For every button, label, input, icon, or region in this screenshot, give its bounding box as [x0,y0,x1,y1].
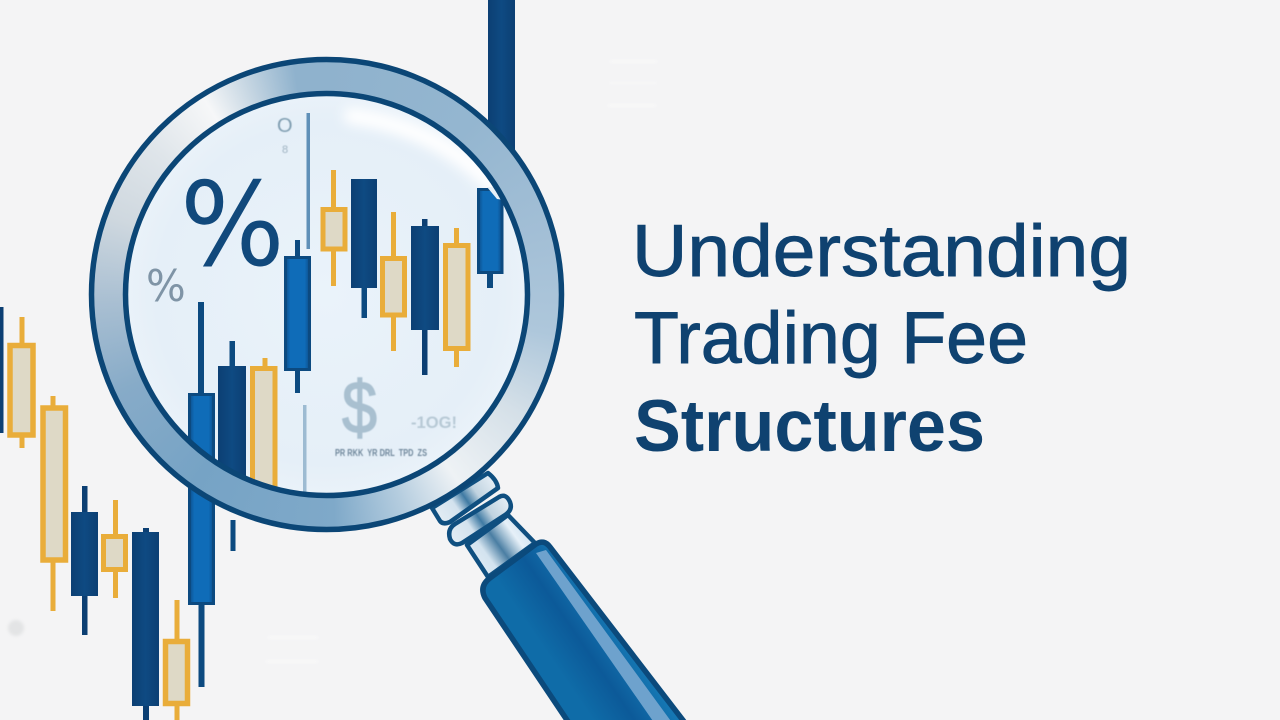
chart scene: candlesticks, lens and handle [0,0,686,720]
gold candle 3 [391,212,396,351]
tall navy candle behind the lens [488,0,515,160]
handle neck [467,515,535,577]
title line 3: Structures [634,386,985,467]
title line 2: Trading Fee [634,298,1028,379]
gold candle 4 [454,228,459,367]
magnifier handle [432,473,692,720]
decorative grey dot [8,620,24,636]
navy candle 3 [422,219,428,375]
handle highlight [536,550,673,720]
lens glass [126,94,528,496]
metallic lens ring [89,57,564,532]
navy candle 1 [230,341,235,366]
thin reference lines [306,113,310,249]
small percent symbol: % [146,261,186,312]
outside candlesticks [0,307,188,720]
title line 1: Understanding [632,211,1131,292]
faint background streaks bottom [266,636,318,663]
blue candle crossing the lens rim [190,302,236,687]
title [632,211,1131,467]
tiny blurred caption: PR RKK YR DRL TPD ZS [335,448,427,459]
small blurred figure: -1OG! [411,413,457,432]
highlight notch on blue candle [487,187,500,200]
handle grip [483,542,692,720]
navy candle 2 [362,288,367,318]
blue candle 2 [295,240,300,393]
lens highlight [352,116,498,190]
dollar sign: $ [342,366,377,449]
large percent symbol: % [180,157,285,293]
handle collar upper [432,473,498,523]
gold candle 2 [331,170,336,286]
handle collar lower [449,496,511,544]
blue candle 3 [487,274,493,288]
ring outer outline [92,60,562,530]
tiny digit glyph: 8 [282,144,288,156]
candlesticks inside lens [218,113,504,506]
gold candle 1 [262,358,268,366]
small circle glyph: O [277,115,293,137]
ring inner outline [126,94,528,496]
faint background streaks top [608,60,657,107]
